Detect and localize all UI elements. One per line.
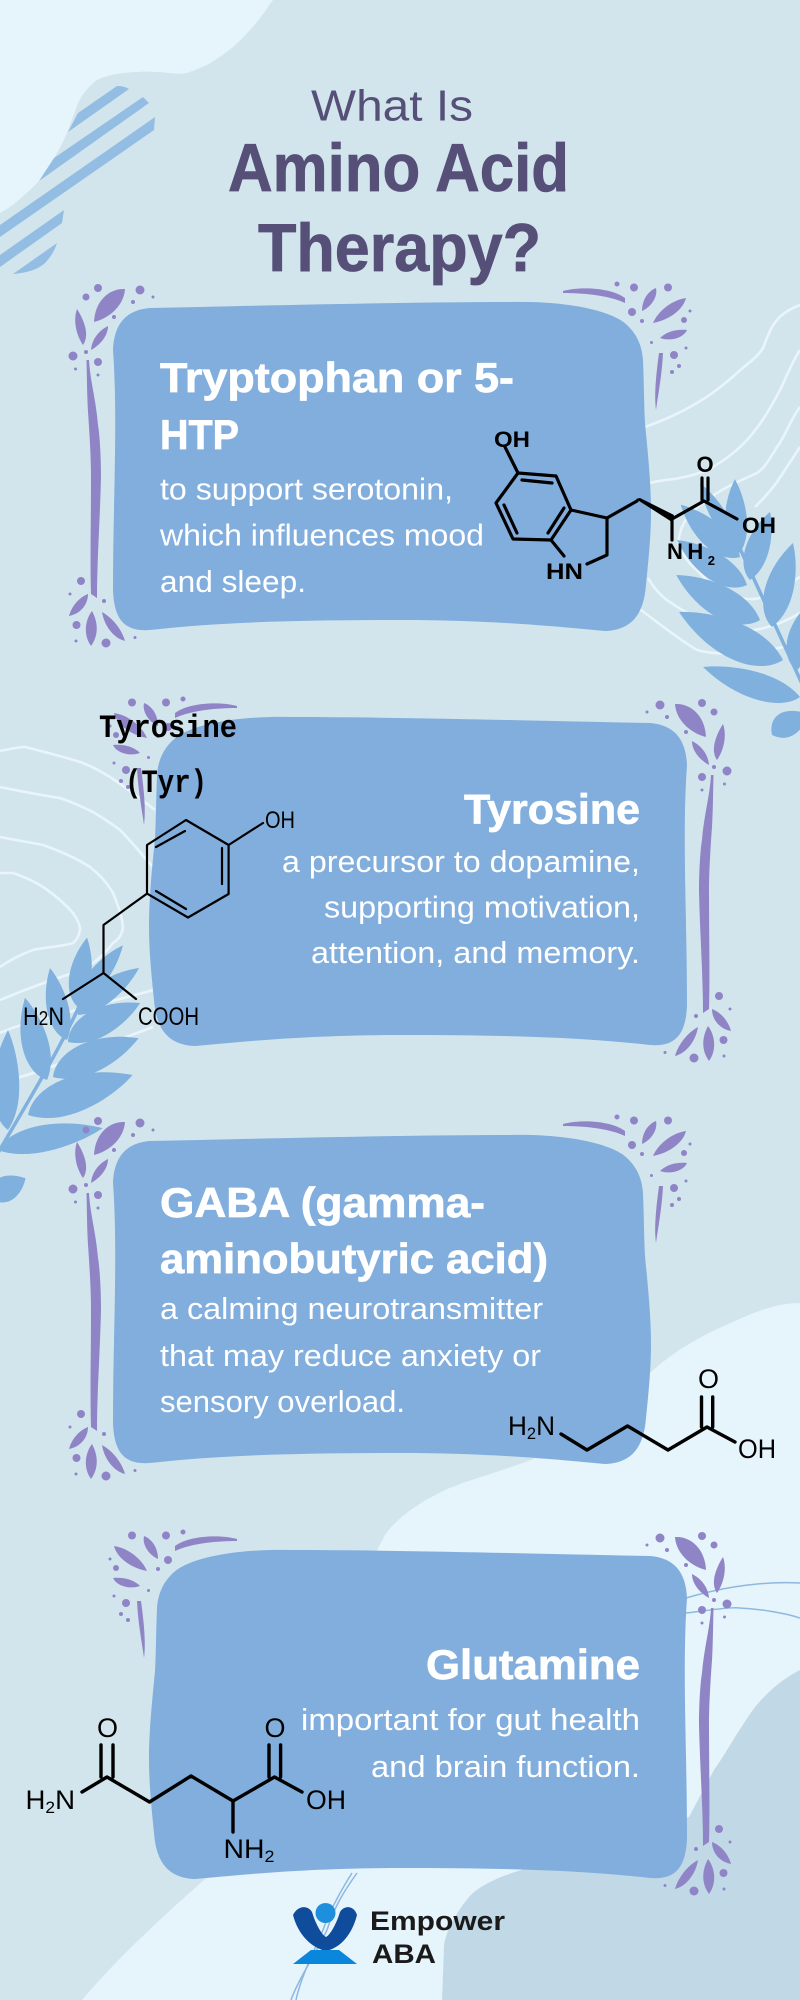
panel text: tryptophan: and sleep.: [160, 564, 306, 599]
molecule: GABA: 2: [527, 1424, 536, 1443]
panel text: tyrosine: attention, and memory.: [311, 935, 640, 970]
panel text: tyrosine: [282, 786, 640, 970]
molecule: tryptophan: [494, 427, 776, 584]
title line: What Is: What Is: [311, 82, 473, 130]
molecule: GABA: OH: [738, 1434, 776, 1464]
molecule: glutamine: [26, 1713, 346, 1866]
molecule: tyrosine: H2N: [23, 1003, 64, 1031]
title line: Amino Acid: Amino Acid: [228, 130, 569, 206]
panel text: tryptophan: to support serotonin,: [160, 472, 453, 506]
panel text: glutamine: Glutamine: [426, 1641, 640, 1688]
panel: tyrosine background: [108, 696, 732, 1062]
title: [228, 82, 569, 286]
molecule: tryptophan: 2: [708, 553, 715, 568]
panel text: tyrosine: supporting motivation,: [324, 890, 640, 924]
molecule: glutamine: H: [26, 1785, 45, 1815]
molecule: glutamine: O: [97, 1713, 118, 1743]
panel text: glutamine: important for gut health: [301, 1702, 640, 1737]
molecule: tryptophan: HN: [546, 559, 583, 584]
panel text: tyrosine: Tyrosine: [464, 786, 640, 832]
molecule: GABA: [508, 1364, 776, 1464]
molecule: tryptophan: NH: [667, 539, 703, 564]
molecule: tyrosine: OH: [265, 807, 295, 834]
fern: right: [668, 479, 800, 744]
molecule: GABA: H: [508, 1411, 528, 1441]
molecule: glutamine: 2: [265, 1847, 274, 1866]
contour lines: [0, 305, 800, 1085]
molecule: tryptophan: OH: [494, 427, 530, 452]
panel text: tryptophan: [159, 354, 514, 599]
molecule: tyrosine: (Tyr): [125, 765, 207, 802]
panel: GABA background: [68, 1114, 692, 1480]
background blob: bottom right: [442, 1670, 800, 2000]
panel text: glutamine: and brain function.: [371, 1749, 640, 1784]
panel text: tyrosine: a precursor to dopamine,: [282, 844, 640, 879]
panel: glutamine background: [108, 1530, 732, 1896]
molecule: tyrosine: Tyrosine: [99, 710, 237, 747]
molecule: tyrosine: COOH: [138, 1003, 199, 1031]
logo: Empower ABA: [293, 1903, 506, 1969]
molecule: glutamine: 2: [45, 1798, 55, 1817]
panel text: tryptophan: Tryptophan or 5-: [160, 354, 514, 401]
background blob: bottom light: [82, 1303, 800, 2000]
molecule: tryptophan: O: [696, 452, 714, 477]
molecule: glutamine: OH: [306, 1785, 346, 1815]
icon: logo mark: [293, 1903, 357, 1964]
panel text: tryptophan: HTP: [160, 411, 239, 458]
thin blue lines: [291, 1583, 800, 2000]
diagonal stripes: [0, 86, 155, 274]
panel text: tryptophan: which influences mood: [159, 518, 484, 552]
panel text: GABA: GABA (gamma-: [160, 1179, 485, 1226]
logo: Empower ABA: ABA: [372, 1939, 436, 1969]
panel text: GABA: [160, 1179, 548, 1419]
molecule: GABA: O: [698, 1364, 719, 1394]
panel text: GABA: a calming neurotransmitter: [160, 1291, 543, 1326]
logo text: Empower: [370, 1906, 506, 1936]
background blob: top left: [0, 0, 273, 213]
fern: left: [0, 936, 146, 1209]
panel text: GABA: aminobutyric acid): [160, 1235, 548, 1282]
molecule: tyrosine: [23, 710, 295, 1031]
panel text: GABA: that may reduce anxiety or: [160, 1338, 541, 1373]
molecule: glutamine: NH: [224, 1834, 262, 1864]
panel text: glutamine: [301, 1641, 640, 1784]
panel text: GABA: sensory overload.: [160, 1384, 405, 1419]
molecule: glutamine: N: [55, 1785, 75, 1815]
panel: tryptophan background: [68, 282, 692, 648]
title line: Therapy?: Therapy?: [258, 210, 541, 286]
molecule: glutamine: O: [264, 1713, 286, 1743]
molecule: tryptophan: OH: [742, 513, 776, 538]
molecule: GABA: N: [536, 1411, 555, 1441]
